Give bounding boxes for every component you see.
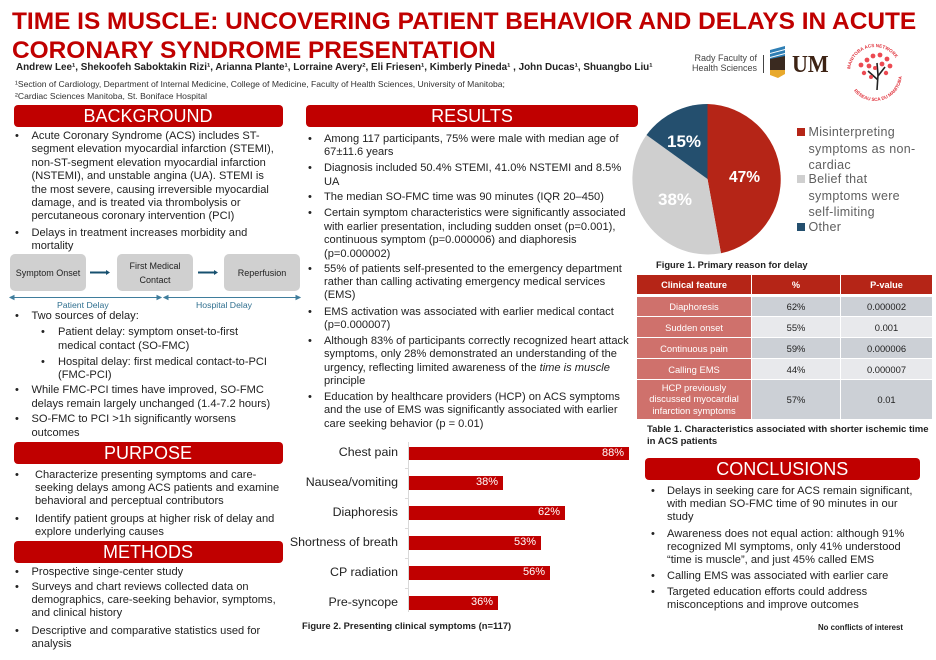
results text: rather than calling activating emergency medical services xyxy=(324,276,605,288)
bar chart: presenting symptoms: 88% xyxy=(602,446,624,458)
background text: delays: Hospital delay: first medical contact-to-PCI xyxy=(58,356,267,368)
background text xyxy=(15,130,274,252)
purpose text: explore underlying causes xyxy=(35,526,164,538)
methods text: demographics, care-seeking behavior, symptoms, xyxy=(32,594,276,606)
caption: table 1: in ACS patients xyxy=(647,436,717,447)
purpose text xyxy=(15,468,279,538)
flow box: symptom onset: Symptom Onset xyxy=(16,268,80,278)
logo: Rady Faculty UM: Rady Faculty of xyxy=(694,53,757,63)
pie legend: Belief that xyxy=(808,172,867,186)
table: clinical features: Continuous pain xyxy=(660,342,728,354)
results text: Diagnosis included 50.4% STEMI, 41.0% NSTEMI and 8.5% xyxy=(324,162,621,174)
methods text xyxy=(15,566,276,650)
results text: symptoms, only 28% demonstrated an understanding of the xyxy=(324,348,617,360)
flow arrows xyxy=(9,270,301,300)
heading: methods: METHODS xyxy=(103,542,193,562)
heading: results xyxy=(306,105,638,127)
bar chart: presenting symptoms: 56% xyxy=(523,566,545,578)
results text: The median SO-FMC time was 90 minutes (IQR 20–450) xyxy=(324,191,604,203)
heading: results: RESULTS xyxy=(431,106,513,126)
conclusions text: Delays in seeking care for ACS remain significant, xyxy=(667,485,912,497)
background text: delays: (FMC-PCI) xyxy=(58,369,112,381)
background text: (NSTEMI), and unstable angina (UA). STEMI is xyxy=(32,170,264,182)
table: clinical features: 55% xyxy=(787,322,805,332)
purpose text: • xyxy=(15,468,19,480)
background text: • xyxy=(15,227,19,239)
heading: purpose: PURPOSE xyxy=(104,443,192,463)
background text: delays: delays remain largely unchanged (1.4-7.2 hours) xyxy=(32,398,270,410)
background text: delays xyxy=(15,310,270,439)
affiliations: ¹Section of Cardiology, Department of Internal Medicine, College of Medicine, Faculty of Health Sciences, University of Manitoba; xyxy=(15,79,505,89)
conclusions text: study xyxy=(667,511,694,523)
methods text: Prospective singe-center study xyxy=(32,566,183,578)
methods text: Descriptive and comparative statistics used for xyxy=(32,624,260,636)
conclusions text: Calling EMS was associated with earlier care xyxy=(667,570,888,582)
table: clinical features: 0.001 xyxy=(875,322,898,332)
table: clinical features: % xyxy=(792,280,800,290)
background text: delays: Patient delay: symptom onset-to-first xyxy=(58,326,238,338)
background text: Acute Coronary Syndrome (ACS) includes ST- xyxy=(32,130,260,142)
purpose text: • xyxy=(15,512,19,524)
table: clinical features: Calling EMS xyxy=(668,364,720,374)
background text: delays: • xyxy=(41,326,45,338)
flow box: first medical contact: First Medical xyxy=(129,260,180,270)
flow box: reperfusion: Reperfusion xyxy=(238,268,286,278)
label: patient delay: Patient Delay xyxy=(57,300,109,310)
results text: (p=0.000007) xyxy=(324,319,390,331)
methods text: • xyxy=(15,580,19,592)
results text: (EMS) xyxy=(324,289,355,301)
title: CORONARY SYNDROME PRESENTATION xyxy=(12,36,496,64)
pie legend: symptoms as non- xyxy=(808,142,915,156)
background text: non-ST-segment elevation myocardial infarction xyxy=(32,157,266,169)
results text: • xyxy=(308,162,312,174)
results text xyxy=(308,133,629,430)
background text: delays: While FMC-PCI times have improved, SO-FMC xyxy=(32,384,264,396)
table: clinical features: Sudden onset xyxy=(665,322,723,332)
logo: Manitoba ACS Network xyxy=(847,44,902,101)
caption: table 1: Table 1. Characteristics associated with shorter ischemic time xyxy=(647,424,929,435)
pie chart: reason for delay: 47% xyxy=(729,169,760,186)
methods text: and clinical history xyxy=(32,607,122,619)
results text: Certain symptom characteristics were significantly associated xyxy=(324,207,626,219)
conclusions text xyxy=(651,485,912,611)
heading: background xyxy=(14,105,282,127)
conclusions text: • xyxy=(651,586,655,598)
purpose text: Characterize presenting symptoms and care- xyxy=(35,468,256,480)
results text: EMS activation was associated with earlier medical contact xyxy=(324,306,614,318)
table: clinical features: P-value xyxy=(870,280,903,290)
logo: Manitoba ACS Network: MANITOBA ACS NETWORK xyxy=(847,44,898,69)
conclusions text: Targeted education efforts could address xyxy=(667,586,867,598)
pie legend: self-limiting xyxy=(808,205,875,219)
bar chart: presenting symptoms: Diaphoresis xyxy=(333,505,398,519)
table: clinical features: 44% xyxy=(787,364,805,374)
results text: care seeking behavior (p = 0.01) xyxy=(324,418,483,430)
purpose text: seeking delays among ACS patients and examine xyxy=(35,482,279,494)
bar chart: presenting symptoms: Shortness of breath xyxy=(290,535,398,549)
bar chart: presenting symptoms: 38% xyxy=(476,476,498,488)
bar chart: presenting symptoms: 36% xyxy=(471,596,493,608)
label: hospital delay: Hospital Delay xyxy=(196,300,252,310)
logo: Manitoba ACS Network: RÉSEAU SCA DU MANITOBA xyxy=(854,76,902,101)
flow box: reperfusion xyxy=(224,254,300,291)
logo: Rady Faculty UM: UM xyxy=(792,49,829,77)
results text: principle xyxy=(324,375,365,387)
bar chart: presenting symptoms xyxy=(290,442,629,612)
results text: and the use of EMS was significantly associated with earlier xyxy=(324,404,618,416)
heading: purpose xyxy=(14,442,282,464)
heading: background: BACKGROUND xyxy=(83,106,212,126)
table: clinical features: Diaphoresis xyxy=(669,301,719,312)
conclusions text: • xyxy=(651,528,655,540)
title xyxy=(12,8,916,64)
methods text: • xyxy=(15,566,19,578)
conclusions text: misconceptions and improve outcomes xyxy=(667,599,859,611)
table: clinical features xyxy=(637,275,932,419)
results text: • xyxy=(308,335,312,347)
heading: conclusions xyxy=(645,458,920,480)
conclusions text: • xyxy=(651,485,655,497)
pie chart: reason for delay: 38% xyxy=(658,190,692,209)
results text: • xyxy=(308,191,312,203)
results text: 55% of patients self-presented to the emergency department xyxy=(324,263,622,275)
background text: Delays in treatment increases morbidity and xyxy=(32,227,247,239)
background text: delays: outcomes xyxy=(32,427,80,439)
results text: • xyxy=(308,133,312,145)
bar chart: presenting symptoms: 62% xyxy=(538,506,560,518)
results text: Education by healthcare providers (HCP) on ACS symptoms xyxy=(324,391,620,403)
results text: Among 117 participants, 75% were male with median age of xyxy=(324,133,619,145)
logo: Rady Faculty UM xyxy=(692,46,829,78)
table: clinical features: 0.000006 xyxy=(867,342,906,354)
pie legend: Misinterpreting xyxy=(808,125,895,139)
table: clinical features: 59% xyxy=(787,342,805,354)
background text: delays: • xyxy=(15,413,19,425)
conclusions text: with median SO-FMC time of 90 minutes in our xyxy=(667,498,898,510)
pie legend xyxy=(797,125,915,234)
results text: UA xyxy=(324,176,339,188)
table: clinical features: 0.000002 xyxy=(867,301,906,312)
flow box: symptom onset xyxy=(10,254,86,291)
table: clinical features: infarction symptoms xyxy=(652,405,736,416)
conclusions text: recognized MI symptoms, only 41% understood xyxy=(667,541,901,553)
methods text: • xyxy=(15,624,19,636)
caption: table 1 xyxy=(647,424,929,447)
heading: methods xyxy=(14,541,282,563)
background text: delays: medical contact (SO-FMC) xyxy=(58,340,189,352)
conclusions text: • xyxy=(651,570,655,582)
results text: • xyxy=(308,207,312,219)
pie legend: cardiac xyxy=(808,158,851,172)
background text: • xyxy=(15,130,19,142)
background text: damage, and is treated via thrombolysis or xyxy=(32,197,241,209)
pie chart: reason for delay: 15% xyxy=(667,132,701,151)
bar chart: presenting symptoms: Pre-syncope xyxy=(328,595,398,609)
background text: the most severe, causing irreversible myocardial xyxy=(32,184,269,196)
table: clinical features: HCP previously xyxy=(662,382,726,393)
table: clinical features: 0.000007 xyxy=(867,364,906,374)
note: conflicts of interest: No conflicts of interest xyxy=(818,623,903,632)
purpose text: behavioral and perceptual contributors xyxy=(35,495,224,507)
results text: urgency, reflecting limited awareness of the time is muscle xyxy=(324,362,610,374)
flow box: first medical contact xyxy=(117,254,193,291)
table: clinical features: Clinical feature xyxy=(661,280,727,290)
pie chart: reason for delay xyxy=(632,104,781,254)
results text: • xyxy=(308,263,312,275)
results text: (p=0.000002) xyxy=(324,248,390,260)
conclusions text: “time is muscle”, and just 45% called EMS xyxy=(667,554,874,566)
pie legend: Other xyxy=(808,220,841,234)
background text: delays: Two sources of delay: xyxy=(32,310,139,322)
background text: mortality xyxy=(32,240,73,252)
results text: 67±11.6 years xyxy=(324,146,393,158)
results text: • xyxy=(308,391,312,403)
heading: conclusions: CONCLUSIONS xyxy=(716,459,848,479)
background text: delays: • xyxy=(41,356,45,368)
table: clinical features: 0.01 xyxy=(877,394,896,404)
purpose text: Identify patient groups at higher risk of delay and xyxy=(35,512,274,524)
background text: delays: SO-FMC to PCI >1h significantly worsens xyxy=(32,413,236,425)
bar chart: presenting symptoms: 53% xyxy=(514,536,536,548)
table: clinical features: 57% xyxy=(787,394,805,404)
results text: continuous symptom (p=0.000006) and diaphoresis xyxy=(324,234,577,246)
bar chart: presenting symptoms: CP radiation xyxy=(330,565,398,579)
conclusions text: Awareness does not equal action: although 91% xyxy=(667,528,904,540)
caption: figure 1: Figure 1. Primary reason for delay xyxy=(656,259,808,270)
table: clinical features: discussed myocardial xyxy=(649,393,739,404)
bar chart: presenting symptoms: Nausea/vomiting xyxy=(306,475,398,489)
background text: delays: • xyxy=(15,310,19,322)
results text: with earlier presentation, including sudden onset (p=0.001), xyxy=(324,221,615,233)
affiliations xyxy=(15,79,505,101)
flow box: first medical contact: Contact xyxy=(139,274,170,284)
caption: figure 2: Figure 2. Presenting clinical symptoms (n=117) xyxy=(302,620,511,631)
affiliations: ²Cardiac Sciences Manitoba, St. Boniface Hospital xyxy=(15,91,207,101)
pie legend: symptoms were xyxy=(808,188,900,202)
bar chart: presenting symptoms: Chest pain xyxy=(339,445,398,459)
methods text: Surveys and chart reviews collected data on xyxy=(32,580,249,592)
background text: delays: • xyxy=(15,384,19,396)
results text: • xyxy=(308,306,312,318)
background text: percutaneous coronary intervention (PCI) xyxy=(32,210,234,222)
logo: Rady Faculty UM: Health Sciences xyxy=(692,62,757,72)
title: TIME IS MUSCLE: UNCOVERING PATIENT BEHAVIOR AND DELAYS IN ACUTE xyxy=(12,8,916,35)
delay flow diagram xyxy=(9,254,301,310)
table: clinical features: 62% xyxy=(787,301,805,312)
background text: segment elevation myocardial infarction (STEMI), xyxy=(32,143,274,155)
authors: Andrew Lee¹, Shekoofeh Saboktakin Rizi¹, Arianna Plante¹, Lorraine Avery², Eli Friesen¹, Kimberly Pineda¹ , John Ducas¹, Shuangbo Liu¹ xyxy=(16,62,653,73)
methods text: analysis xyxy=(32,638,72,650)
chart axis xyxy=(408,442,409,612)
results text: Although 83% of participants correctly recognized heart attack xyxy=(324,335,629,347)
